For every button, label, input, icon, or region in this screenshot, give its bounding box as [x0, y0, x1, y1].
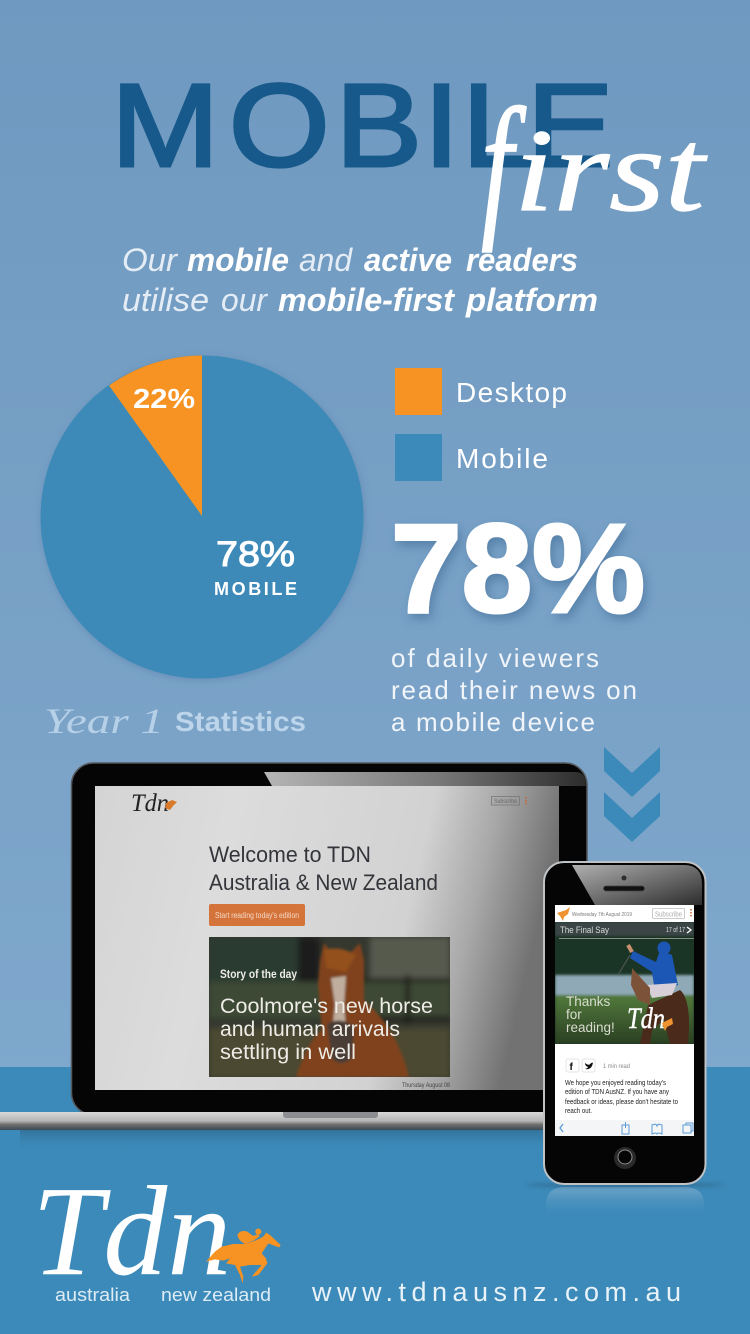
legend: mobile: [395, 434, 548, 481]
phone photo: reading!: [566, 1020, 615, 1035]
pie: mobile slice: [40, 356, 364, 678]
phone article text: edition of TDN AusNZ. If you have any: [565, 1089, 669, 1096]
subtitle: readers: [466, 242, 578, 278]
story text: Story of the day: [220, 969, 298, 981]
phone article text: feedback or ideas, please don't hesitate to: [565, 1099, 678, 1106]
phone header: Wednesday 7th August 2019: [572, 912, 632, 918]
subtitle: Our: [122, 242, 178, 278]
laptop: [0, 763, 600, 1130]
subscribe button: Subscribe: [494, 799, 518, 805]
website url: www.tdnausnz.com.au: [311, 1277, 681, 1307]
phone reflection: [525, 1184, 725, 1218]
phone article text: reach out.: [565, 1108, 592, 1115]
story text: Coolmore's new horse: [220, 994, 433, 1018]
subtitle: platform: [465, 282, 598, 318]
legend: mobile: Mobile: [456, 443, 548, 474]
pie: desktop slice: [109, 356, 202, 516]
subtitle: [122, 242, 598, 318]
legend: desktop: Desktop: [456, 377, 567, 408]
phone photo: Tdn: [627, 1002, 665, 1035]
phone home button: [614, 1147, 636, 1169]
phone photo: for: [566, 1007, 582, 1022]
phone article text: [565, 1080, 678, 1115]
pie label: 78% mobile: 78%: [216, 535, 295, 574]
phone browser toolbar: [555, 1120, 694, 1136]
story image: [209, 937, 450, 1078]
logo wordmark: Tdn: [32, 1160, 231, 1302]
pie label: 22%: 22%: [133, 383, 195, 414]
logo: TDN: [32, 1160, 281, 1305]
phone header: [557, 907, 691, 921]
laptop bezel glare: [264, 772, 586, 786]
date: Thursday August 08: [402, 1083, 451, 1089]
phone: [544, 862, 706, 1184]
pie label: 78% mobile: MOBILE: [214, 579, 297, 599]
phone share buttons: 1 min read: [603, 1064, 630, 1070]
title script: first: f: [481, 77, 526, 254]
legend: [395, 368, 567, 481]
story text: settling in well: [220, 1040, 356, 1064]
stat caption: [391, 643, 637, 737]
welcome heading: Australia & New Zealand: [209, 870, 438, 895]
logo tagline: new zealand: [161, 1285, 271, 1305]
year 1 statistics: [44, 701, 306, 741]
subtitle: active: [364, 242, 452, 278]
jockey and horse: [618, 942, 689, 1044]
phone body: [544, 862, 706, 1184]
icon: racehorse and jockey: [206, 1229, 281, 1283]
title script: first: irst: [514, 105, 708, 236]
phone share buttons: [566, 1059, 630, 1073]
laptop shadow: [20, 1130, 590, 1152]
phone speaker and camera: [604, 876, 644, 891]
logo tagline: [55, 1285, 271, 1305]
story text: [220, 969, 433, 1064]
phone glare: [572, 865, 702, 905]
year 1 statistics: Year 1: [44, 701, 164, 741]
stat caption: of daily viewers: [391, 643, 599, 673]
phone photo: [555, 922, 694, 1044]
legend: desktop: [395, 368, 567, 415]
subtitle: utilise: [122, 282, 209, 318]
year 1 statistics: Statistics: [175, 706, 306, 737]
phone share buttons: f: [570, 1062, 574, 1073]
welcome heading: Welcome to TDN: [209, 842, 371, 867]
site logo: Tdn: [131, 790, 169, 817]
phone screen: [555, 905, 694, 1136]
phone header: Subscribe: [655, 912, 682, 918]
story text: and human arrivals: [220, 1017, 400, 1041]
phone photo: The Final Say: [560, 925, 609, 936]
subtitle: mobile-first: [278, 282, 455, 318]
start reading button: [209, 904, 305, 926]
subscribe button: [492, 796, 526, 805]
stat caption: read their news on: [391, 675, 637, 705]
stat caption: a mobile device: [391, 707, 595, 737]
subtitle: mobile: [187, 242, 289, 278]
laptop base: [0, 1112, 600, 1130]
icon: chevrons pointing down: [604, 747, 660, 842]
subtitle: and: [299, 242, 353, 278]
phone photo: Thanks: [566, 994, 611, 1009]
big stat: 78%: 78%: [391, 498, 645, 639]
logo tagline: australia: [55, 1285, 131, 1305]
title script: first: [481, 77, 708, 254]
laptop screen: [95, 786, 559, 1090]
start reading button: Start reading today's edition: [215, 911, 299, 920]
phone article text: We hope you enjoyed reading today's: [565, 1080, 666, 1087]
laptop lid: [72, 763, 587, 1115]
pie label: 78% mobile: [214, 535, 297, 599]
subtitle: our: [221, 282, 268, 318]
phone photo: 17 of 17: [666, 925, 685, 934]
pie chart: [40, 356, 364, 678]
welcome heading: [209, 842, 438, 895]
title: MOBILE: MOBILE: [111, 60, 613, 192]
